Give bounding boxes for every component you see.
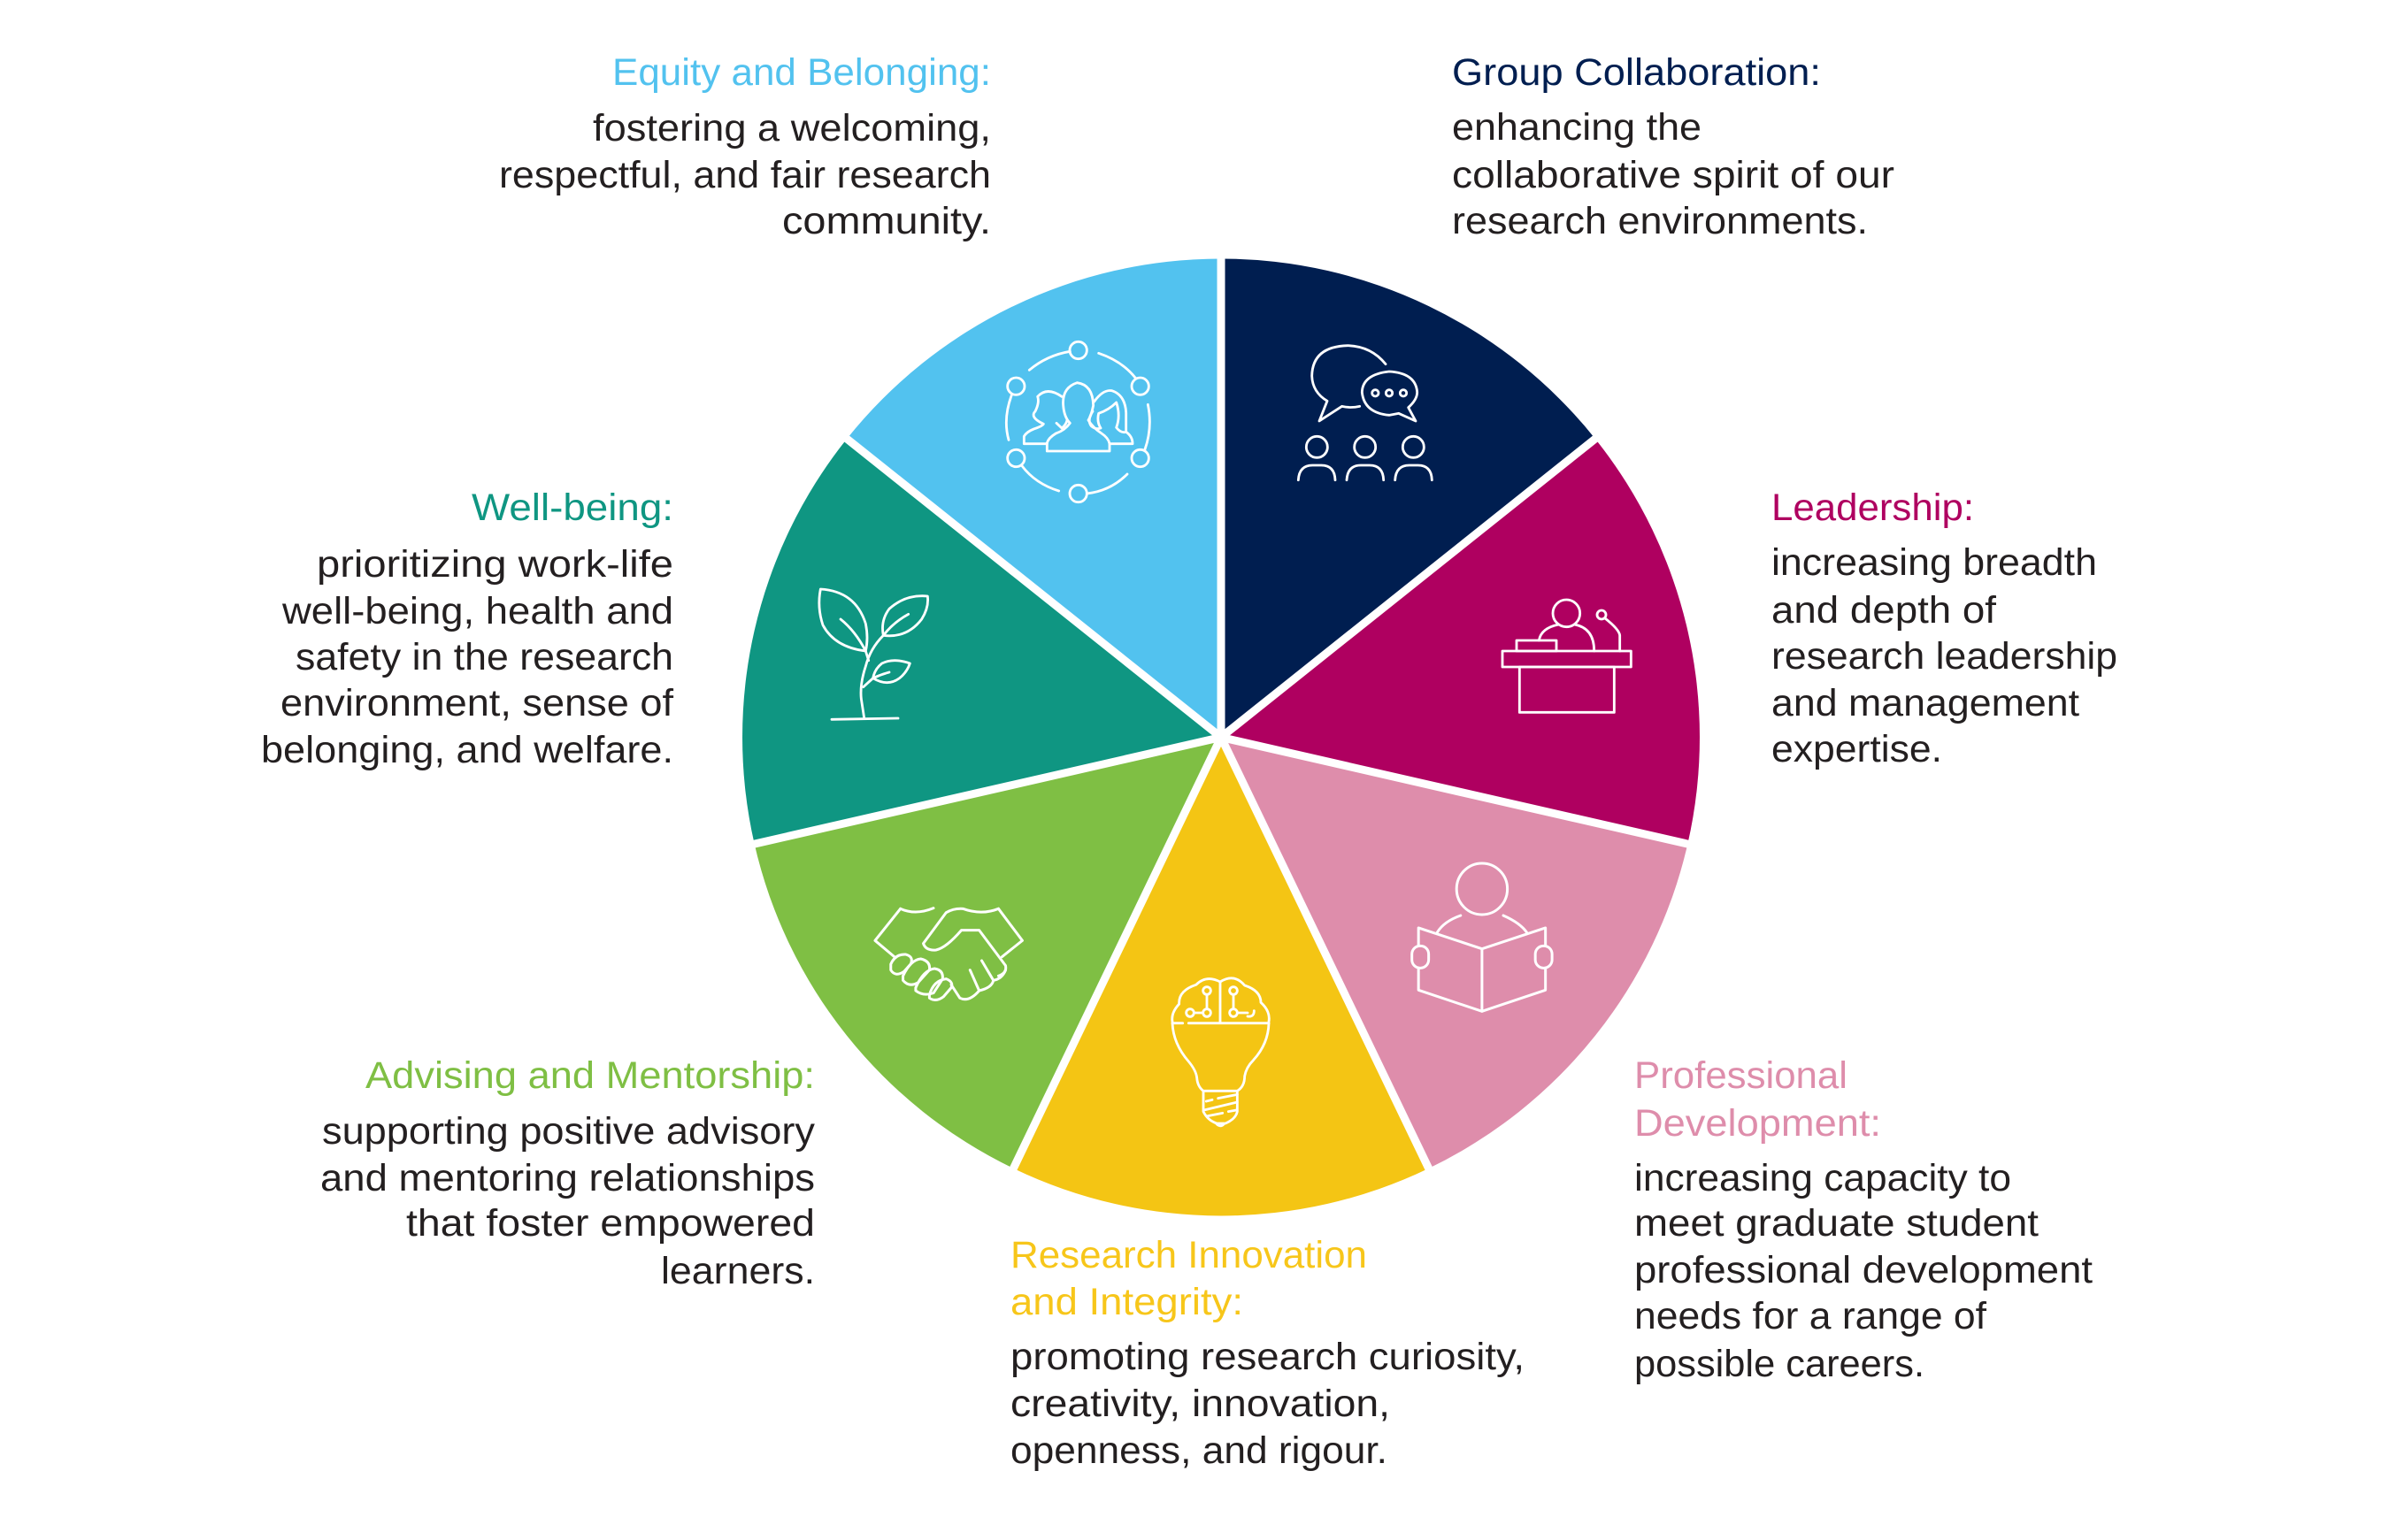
body: research innovation and integrity: openness, and rigour. bbox=[1010, 1429, 1387, 1472]
text: leadership bbox=[1771, 487, 2117, 770]
body: equity and belonging: respectful, and fair research bbox=[499, 154, 991, 196]
body: leadership: research leadership bbox=[1771, 635, 2117, 678]
heading: professional development: Professional bbox=[1634, 1054, 1847, 1097]
wedge: professional development bbox=[1221, 738, 1687, 1168]
body: research innovation and integrity bbox=[1010, 1336, 1525, 1472]
wedge: leadership bbox=[1221, 439, 1700, 844]
heading: equity and belonging: Equity and Belonging: bbox=[612, 51, 991, 94]
text: research innovation and integrity bbox=[1010, 1234, 1525, 1472]
body: advising and mentorship: learners. bbox=[661, 1250, 815, 1292]
heading: professional development bbox=[1634, 1054, 1881, 1145]
heading: research innovation and integrity: and Integrity: bbox=[1010, 1281, 1243, 1323]
body: group collaboration: collaborative spirit of our bbox=[1452, 154, 1894, 196]
body: well-being: safety in the research bbox=[296, 636, 673, 678]
wedge: equity and belonging bbox=[847, 258, 1221, 738]
body: leadership: expertise. bbox=[1771, 728, 1942, 770]
wedge: research innovation and integrity bbox=[1013, 738, 1429, 1215]
body: leadership bbox=[1771, 541, 2117, 770]
icon: seedling bbox=[819, 589, 928, 719]
text: well-being bbox=[261, 487, 674, 771]
body: professional development: needs for a range of bbox=[1634, 1295, 1987, 1337]
heading: leadership: Leadership: bbox=[1771, 487, 1974, 529]
icon: speaker at podium bbox=[1502, 600, 1631, 712]
body: group collaboration bbox=[1452, 106, 1894, 242]
body: well-being: well-being, health and bbox=[281, 590, 673, 632]
text: advising and mentorship bbox=[320, 1054, 816, 1292]
body: well-being bbox=[261, 543, 674, 771]
icon: lightbulb with brain bbox=[1172, 978, 1269, 1126]
text: group collaboration bbox=[1452, 51, 1894, 242]
body: equity and belonging bbox=[499, 107, 991, 242]
body: professional development: meet graduate student bbox=[1634, 1202, 2039, 1245]
pie chart bbox=[742, 248, 1700, 1215]
body: professional development: possible careers. bbox=[1634, 1343, 1924, 1385]
text: equity and belonging bbox=[499, 51, 991, 242]
body: equity and belonging: fostering a welcoming, bbox=[593, 107, 991, 149]
heading: professional development: Development: bbox=[1634, 1102, 1881, 1145]
wedge: advising and mentorship bbox=[755, 738, 1221, 1168]
body: research innovation and integrity: creativity, innovation, bbox=[1010, 1383, 1390, 1425]
body: well-being: prioritizing work-life bbox=[317, 543, 673, 586]
heading: research innovation and integrity bbox=[1010, 1234, 1367, 1323]
body: advising and mentorship: that foster empowered bbox=[406, 1202, 815, 1245]
wedge: group collaboration bbox=[1221, 258, 1595, 738]
heading: group collaboration: Group Collaboration: bbox=[1452, 51, 1821, 94]
body: leadership: and depth of bbox=[1771, 589, 1997, 632]
body: equity and belonging: community. bbox=[782, 200, 991, 242]
body: group collaboration: research environments. bbox=[1452, 200, 1868, 242]
wedge: well-being bbox=[742, 439, 1221, 844]
heading: research innovation and integrity: Research Innovation bbox=[1010, 1234, 1367, 1276]
body: advising and mentorship: and mentoring relationships bbox=[320, 1157, 815, 1199]
text: professional development bbox=[1634, 1054, 2093, 1385]
icon: equity people in circle bbox=[1006, 341, 1149, 502]
body: well-being: belonging, and welfare. bbox=[261, 729, 673, 771]
body: professional development: increasing capacity to bbox=[1634, 1157, 2011, 1199]
body: research innovation and integrity: promoting research curiosity, bbox=[1010, 1336, 1525, 1378]
body: advising and mentorship: supporting positive advisory bbox=[322, 1110, 816, 1153]
body: professional development: professional development bbox=[1634, 1249, 2093, 1291]
icon: handshake bbox=[875, 908, 1022, 1000]
body: advising and mentorship bbox=[320, 1110, 816, 1292]
body: professional development bbox=[1634, 1157, 2093, 1385]
heading: advising and mentorship: Advising and Mentorship: bbox=[365, 1054, 815, 1097]
icon: speech bubbles and group bbox=[1298, 346, 1432, 480]
icon: person reading book bbox=[1412, 863, 1552, 1011]
heading: well-being: Well-being: bbox=[472, 487, 673, 529]
body: leadership: increasing breadth bbox=[1771, 541, 2097, 584]
body: leadership: and management bbox=[1771, 682, 2079, 724]
body: well-being: environment, sense of bbox=[280, 682, 674, 724]
body: group collaboration: enhancing the bbox=[1452, 106, 1701, 149]
